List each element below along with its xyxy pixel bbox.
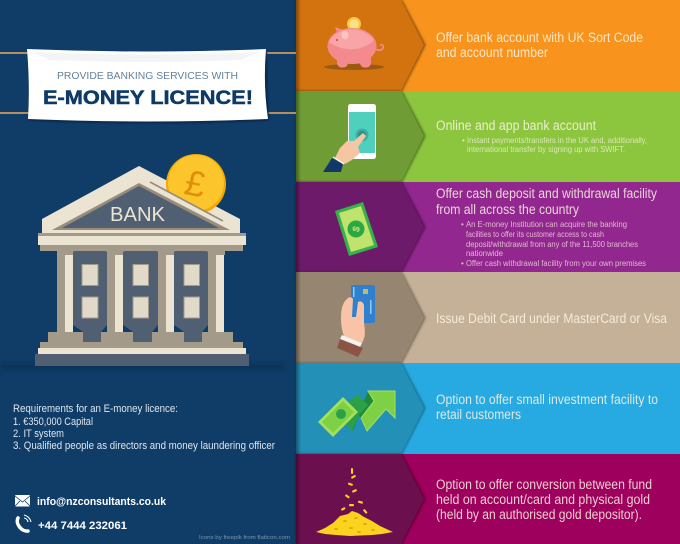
text: bank account heading xyxy=(436,30,643,60)
icon: gold pile xyxy=(316,468,393,536)
panel: green online banking row xyxy=(296,91,680,182)
text block: requirements: 1. €350,000 Capital xyxy=(13,416,93,428)
panel: orange bank account row xyxy=(296,0,680,91)
text: online banking: Online and app bank account xyxy=(436,118,596,133)
text: cash facility: from all across the country xyxy=(436,202,579,217)
text: bank account heading: and account number xyxy=(436,45,548,60)
banner: title xyxy=(0,49,296,124)
text block: requirements: 3. Qualified people as directors and money laundering officer xyxy=(13,440,275,452)
text: cash facility: Offer cash withdrawal facility from your own premises xyxy=(466,259,646,268)
icon: banknote: $ xyxy=(351,225,363,234)
panel: tan debit card row xyxy=(296,272,680,363)
text: online banking: • xyxy=(462,136,465,145)
illustration: bank building with coin xyxy=(0,154,285,370)
base steps xyxy=(48,332,233,342)
icon: hand holding card xyxy=(337,285,375,357)
text: investment: retail customers xyxy=(436,407,521,422)
text: gold conversion: Option to offer conversion between fund xyxy=(436,477,652,492)
text: cash facility xyxy=(436,186,657,268)
text: bank account heading: Offer bank account with UK Sort Code xyxy=(436,30,643,45)
panel: maroon gold row xyxy=(296,454,680,544)
text block: requirements xyxy=(13,403,275,452)
text: email: info@nzconsultants.co.uk xyxy=(37,496,167,508)
icon: envelope xyxy=(15,495,30,506)
text: cash facility: nationwide xyxy=(466,249,504,258)
icon: piggy bank xyxy=(324,17,384,70)
icon: phone and hand xyxy=(323,104,376,172)
icon: phone xyxy=(17,515,31,531)
panel: purple cash row xyxy=(296,182,680,272)
text: cash facility: facilities to offer its customer access to cash xyxy=(466,230,604,239)
text: cash facility: Offer cash deposit and withdrawal facility xyxy=(436,186,657,201)
text block: requirements: Requirements for an E-money licence: xyxy=(13,403,178,415)
text: BANK: BANK xyxy=(110,204,166,226)
text: online banking: Instant payments/transfers in the UK and, additionally, xyxy=(467,136,647,145)
text: cash facility: • xyxy=(461,220,464,229)
columns xyxy=(57,251,65,335)
text block: requirements: 2. IT system xyxy=(13,428,64,440)
panel: blue investment row xyxy=(296,363,680,454)
heading: banner main: E-MONEY LICENCE! xyxy=(43,88,253,109)
text: investment xyxy=(436,392,658,422)
text: gold conversion: (held by an authorised gold depositor). xyxy=(436,507,642,522)
text: gold conversion: held on account/card and physical gold xyxy=(436,492,650,507)
icon: pound coin: £ xyxy=(181,161,209,206)
text: investment: Option to offer small investment facility to xyxy=(436,392,658,407)
text: cash facility: An E-money Institution can acquire the banking xyxy=(466,220,627,229)
icon: money and growth arrow xyxy=(318,391,395,437)
text: phone number: +44 7444 232061 xyxy=(38,520,127,532)
panel: left navy background xyxy=(0,0,296,544)
icon: banknote xyxy=(335,202,378,256)
text: icon credit: Icons by freepik from flaticon.com xyxy=(199,535,290,541)
text: cash facility: deposit/withdrawal from any of the 11,500 branches xyxy=(466,240,638,249)
text: cash facility: • xyxy=(461,259,464,268)
heading: banner subtitle: PROVIDE BANKING SERVICES WITH xyxy=(57,71,238,82)
icon: pound coin xyxy=(166,154,226,214)
text: online banking: international transfer by signing up with SWIFT. xyxy=(467,145,625,154)
doors and windows xyxy=(73,251,107,342)
text: gold conversion xyxy=(436,477,652,522)
roof xyxy=(42,166,240,233)
text: online banking xyxy=(436,118,647,154)
